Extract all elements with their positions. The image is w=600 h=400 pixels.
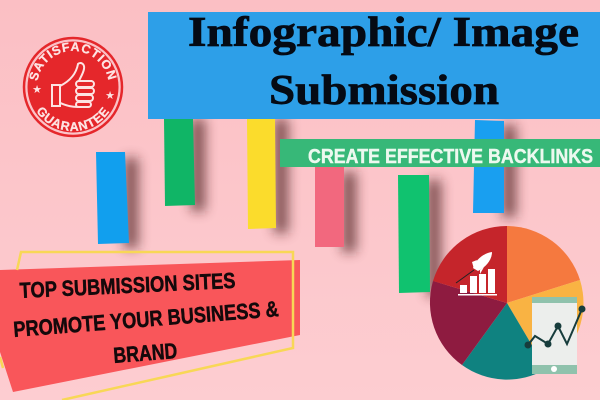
bar: yellow: [247, 119, 276, 229]
bar shadows: [124, 119, 516, 296]
slice: maroon: [430, 281, 507, 365]
title line 1: Infographic/ Image: [188, 10, 579, 56]
slice: red: [433, 226, 507, 303]
bar: green right: [398, 175, 430, 293]
title banner: [148, 10, 600, 119]
green banner: [280, 139, 600, 168]
callout line 1: TOP SUBMISSION SITES: [19, 268, 236, 303]
bar: pink: [315, 160, 344, 247]
slice: yellow: [507, 280, 583, 369]
stamp stars: ★: [105, 89, 115, 102]
slice: teal: [462, 303, 546, 380]
pie chart: [430, 226, 586, 380]
stamp: satisfaction guarantee: [22, 36, 124, 138]
stamp text: satisfaction: SATISFACTION: [30, 42, 117, 80]
icon: thumbs up: [52, 63, 94, 107]
bar: blue right: [473, 120, 504, 213]
yellow outline: [17, 252, 293, 400]
stamp stars: ★: [32, 83, 42, 96]
slice: orange: [507, 226, 580, 303]
stamp text: guarantee: GUARANTEE: [38, 106, 110, 132]
callout line 2: PROMOTE YOUR BUSINESS &: [12, 296, 280, 342]
bar: green: [164, 119, 195, 206]
callout line 3: BRAND: [112, 338, 178, 368]
icon: rocket and bars: [456, 252, 497, 296]
bar: blue left: [96, 152, 129, 244]
stamp stars: [32, 83, 115, 102]
icon: phone with line chart: [524, 297, 586, 374]
red callout: [0, 252, 300, 400]
title line 2: Submission: [269, 68, 499, 114]
